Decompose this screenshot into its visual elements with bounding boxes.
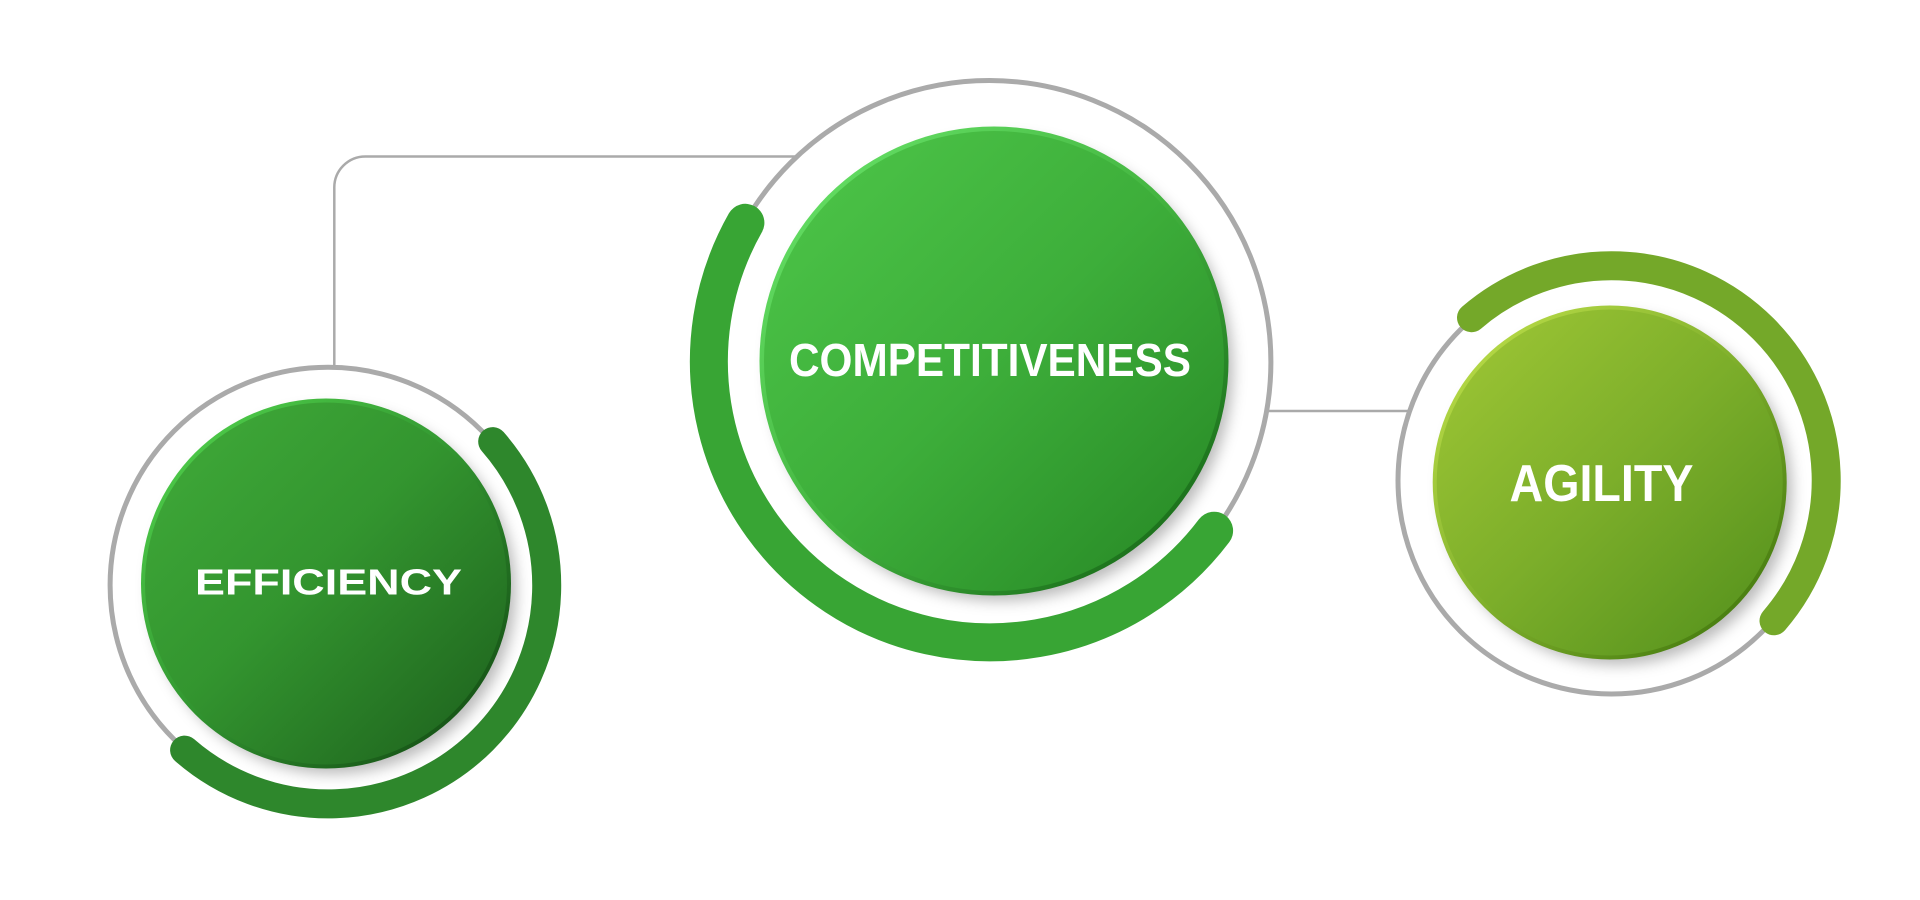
- competitiveness disk: [760, 126, 1228, 596]
- agility label: AGILITY: [1510, 455, 1694, 513]
- efficiency outer ring: [110, 367, 546, 803]
- node: agility: [1398, 266, 1826, 694]
- agility disk: [1433, 306, 1787, 660]
- efficiency label: EFFICIENCY: [195, 562, 462, 602]
- connector: competitiveness to agility: [1268, 410, 1409, 412]
- agility outer ring: [1398, 267, 1825, 694]
- competitiveness arc: [709, 223, 1214, 642]
- connector: efficiency to competitiveness: [334, 156, 796, 367]
- efficiency disk shadow: [150, 408, 516, 774]
- node: efficiency: [110, 367, 547, 804]
- efficiency disk: [141, 398, 511, 768]
- competitiveness label: COMPETITIVENESS: [789, 334, 1191, 386]
- agility arc: [1472, 266, 1826, 621]
- agility disk shadow: [1442, 315, 1792, 665]
- competitiveness disk shadow: [769, 137, 1233, 601]
- efficiency arc: [185, 442, 547, 804]
- competitiveness outer ring: [708, 80, 1271, 644]
- node: competitiveness: [708, 80, 1271, 644]
